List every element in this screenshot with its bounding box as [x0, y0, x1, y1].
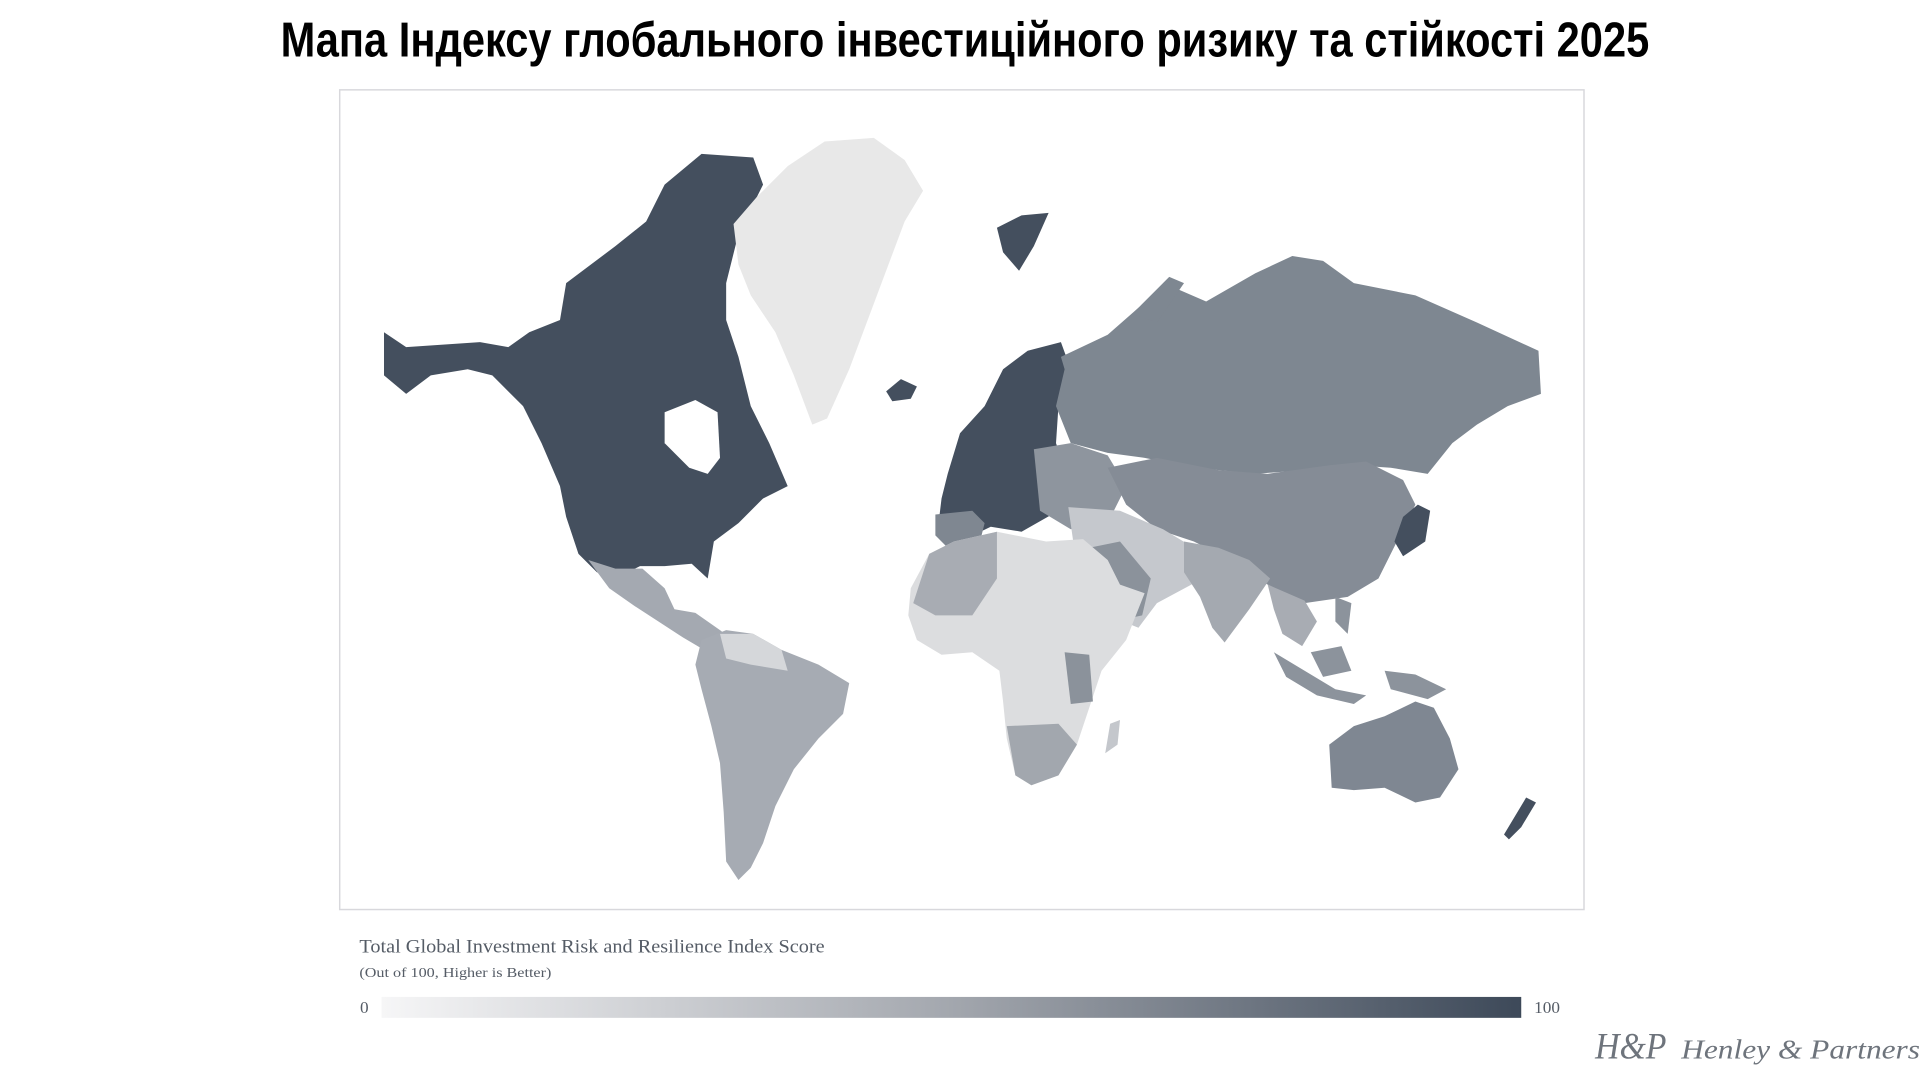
map: China and Central Asia — [1108, 458, 1415, 603]
map: New Zealand — [1504, 798, 1536, 839]
map: Eastern Europe — [1034, 443, 1126, 529]
logo: Henley & Partners: Henley & Partners — [1680, 1034, 1920, 1064]
map: Arabian Peninsula — [1089, 542, 1151, 622]
map: Southern Africa — [1007, 724, 1077, 785]
logo: Henley & Partners — [1594, 1025, 1920, 1066]
legend subtitle: (Out of 100, Higher is Better) — [359, 965, 552, 981]
map: North America (Canada and USA) — [384, 154, 788, 578]
map: Middle East — [1068, 507, 1212, 628]
map: Hudson Bay — [665, 400, 720, 474]
map: Japan and Korea — [1394, 505, 1430, 556]
title: Мапа Індексу глобального інвестиційного ризику та стійкості 2025 — [281, 13, 1649, 68]
map: Mexico and Central America — [588, 560, 736, 660]
map: East Africa — [1065, 652, 1093, 704]
map: Europe — [938, 342, 1071, 542]
map: North-West Africa — [913, 532, 997, 615]
legend: color scale bar: 100 — [1534, 998, 1560, 1017]
legend: color scale bar — [360, 997, 1560, 1018]
map: Greenland — [734, 138, 923, 425]
panel: world map — [340, 90, 1584, 910]
map: Southeast Asia — [1268, 585, 1317, 646]
legend title: Total Global Investment Risk and Resilience Index Score — [359, 937, 825, 958]
map: Iceland — [886, 379, 917, 401]
map: Russia — [1056, 256, 1541, 474]
map: northern South America light — [720, 634, 788, 671]
map: South America — [695, 630, 849, 880]
map: Madagascar — [1105, 720, 1120, 753]
map: Africa — [908, 532, 1145, 785]
legend: color scale bar: 0 — [360, 998, 369, 1017]
map: Australia — [1329, 702, 1458, 802]
map: India — [1184, 542, 1270, 642]
map: Iberia — [935, 511, 985, 548]
map: Indonesia and Philippines — [1274, 597, 1446, 704]
logo: Henley & Partners: H&P — [1594, 1025, 1666, 1066]
map: Russian Arctic islands — [1132, 277, 1184, 322]
map: Svalbard — [997, 213, 1049, 271]
